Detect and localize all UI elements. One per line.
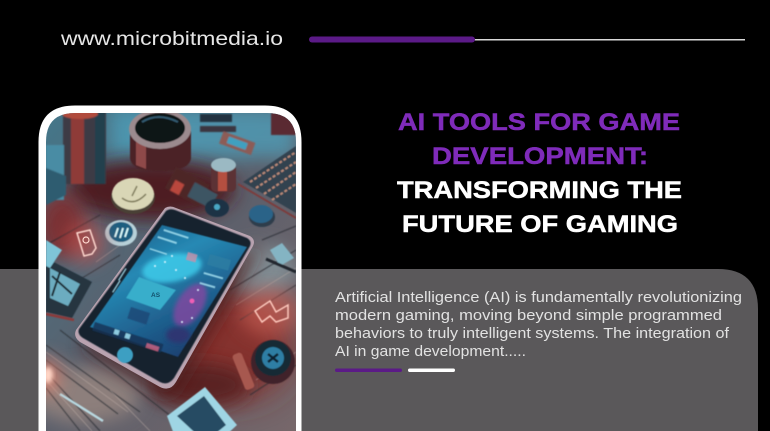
photo frame: white rounded border [38, 106, 302, 431]
smartphone [75, 206, 262, 398]
icon: neon outline right [240, 288, 300, 336]
object: striped badge [105, 220, 137, 246]
title line: white: TRANSFORMING THE [397, 177, 682, 204]
object: keyboard [238, 146, 296, 218]
object: red metal cylinder [46, 108, 106, 205]
object: round chip [232, 340, 295, 391]
description line 1: Artificial Intelligence (AI) is fundamentally revolutionizing [335, 289, 742, 306]
object: metal cup [129, 109, 191, 171]
screen card: AI panel [126, 277, 176, 310]
screen card: AI panel: AS [151, 292, 161, 299]
phone shadow [80, 245, 262, 398]
phone screen [90, 225, 247, 357]
panel: grey description panel [0, 269, 758, 431]
glow: left edge light [32, 357, 60, 393]
object: blue round button [249, 205, 275, 227]
header: website address: www.microbitmedia.io [60, 28, 283, 50]
description line 3: behaviors to truly intelligent systems. The integration of [335, 325, 730, 342]
phone front glass [78, 209, 251, 383]
description text [335, 289, 742, 360]
header rule: purple accent bar [309, 36, 475, 42]
description line 4: AI in game development..... [335, 343, 526, 360]
object: circuit device left [46, 240, 92, 320]
accent: white bar [408, 368, 455, 372]
object: blue photo device [167, 387, 237, 431]
accent: purple bar [335, 368, 402, 372]
photo background: wooden table [30, 108, 297, 431]
object: dark round button [205, 199, 229, 217]
title [397, 109, 682, 238]
phone home button [117, 347, 133, 363]
title line: purple: DEVELOPMENT: [432, 143, 648, 170]
photo: smartphone on a workbench [30, 108, 300, 431]
object: small device right [266, 243, 296, 272]
title line: white: FUTURE OF GAMING [402, 211, 678, 238]
object: small metal cylinder [211, 158, 236, 192]
icon: neon outline left [66, 221, 106, 265]
screen glow: nebula [140, 249, 214, 343]
object: cream coin [111, 178, 155, 214]
screen UI blocks [92, 229, 231, 353]
object: stylus pin [60, 394, 103, 421]
object: top right gadgets [165, 113, 298, 209]
header rule: thin white line [470, 39, 745, 40]
description line 2: modern gaming, moving beyond simple programmed [335, 307, 722, 324]
title line: purple: AI TOOLS FOR GAME [398, 109, 680, 136]
phone body [75, 206, 254, 389]
